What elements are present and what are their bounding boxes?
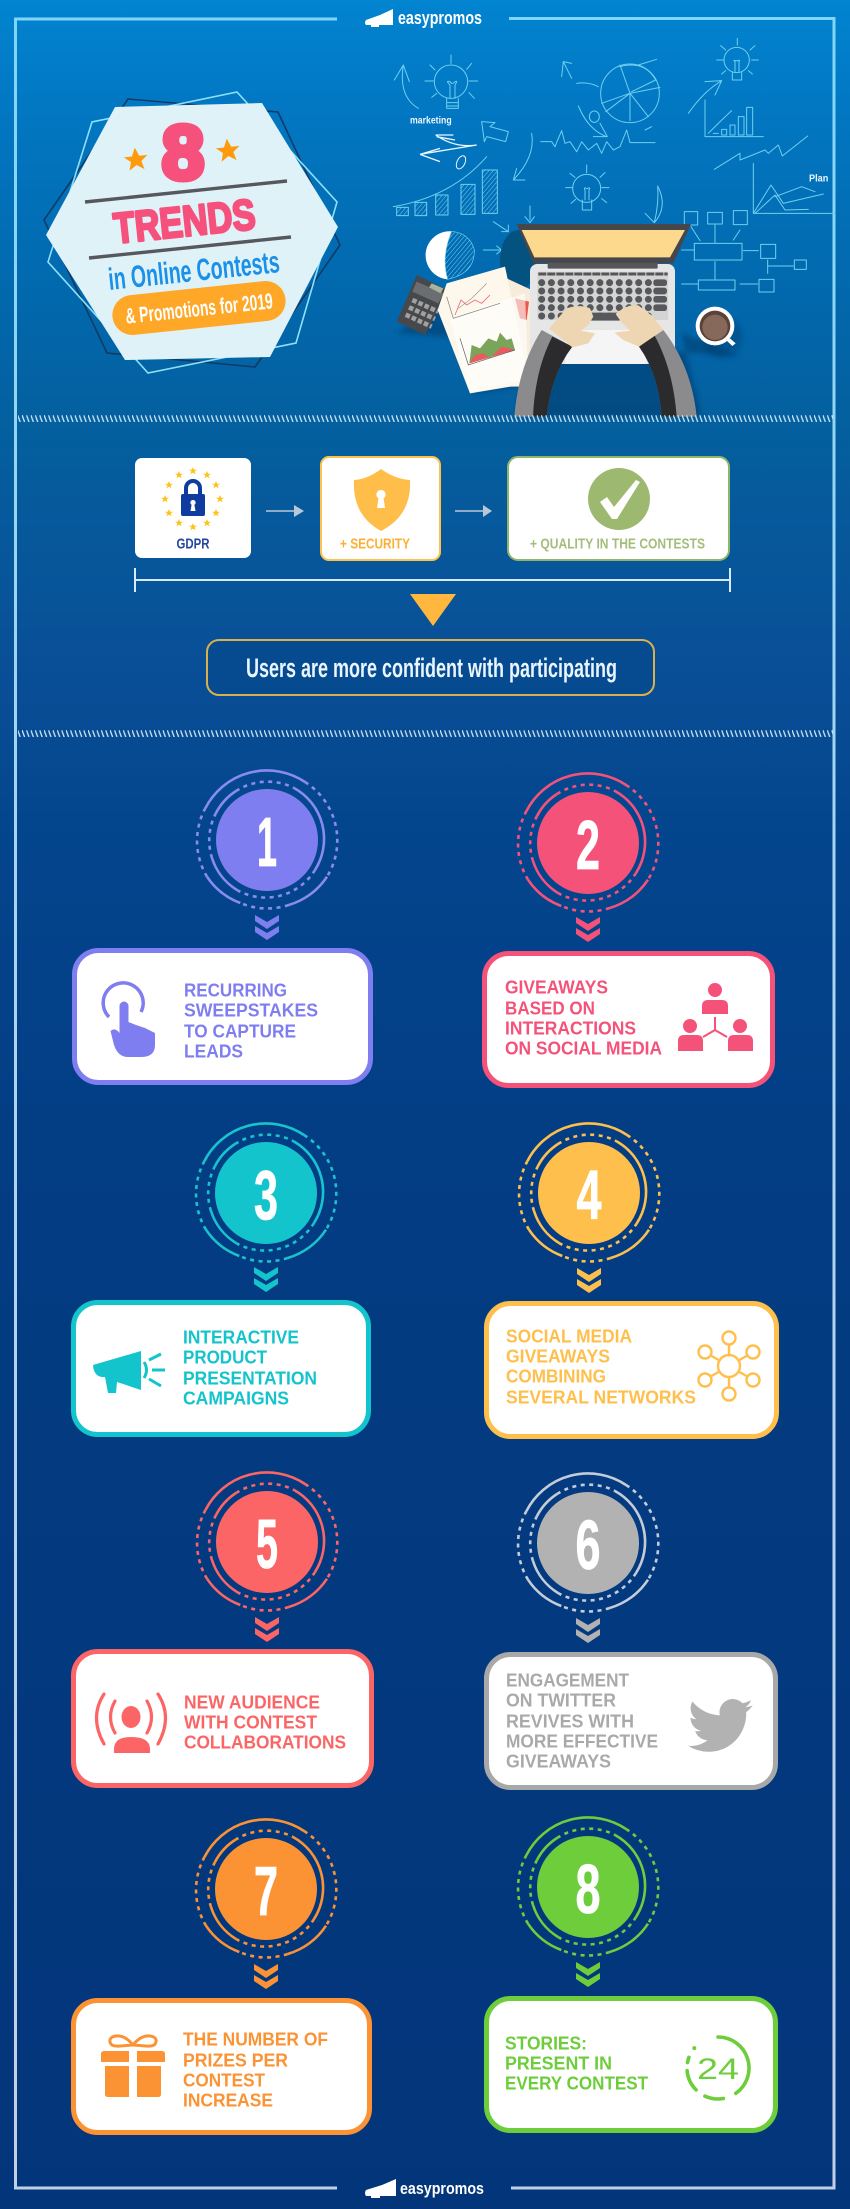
trend 8: EVERY CONTEST <box>505 2072 649 2094</box>
card: GDPR: GDPR <box>176 536 210 552</box>
sketch line art <box>393 38 835 292</box>
trend 3: PRESENTATION <box>183 1368 317 1388</box>
trend 3 <box>74 1123 368 1434</box>
arrow <box>266 505 304 517</box>
bracket <box>135 568 730 592</box>
card: security <box>321 457 440 560</box>
trend 7 <box>74 1819 370 2132</box>
logo: bottom easypromos: easypromos <box>400 2179 484 2198</box>
icon: 24 hours <box>687 2037 749 2099</box>
title word TRENDS: TRENDS <box>111 191 258 253</box>
trend 6: ENGAGEMENT <box>506 1670 630 1690</box>
orange pill <box>110 279 288 337</box>
trend 4: GIVEAWAYS <box>506 1346 610 1366</box>
trend 3: CAMPAIGNS <box>183 1388 289 1408</box>
sketch labels <box>410 115 828 185</box>
trend 3: INTERACTIVE <box>183 1326 299 1348</box>
trend 3: PRODUCT <box>183 1346 268 1368</box>
trend 6: REVIVES WITH <box>506 1710 634 1732</box>
trend 1: 1 <box>257 803 277 881</box>
laptop <box>517 224 691 364</box>
trend 5: NEW AUDIENCE <box>184 1692 320 1712</box>
sketch labels: marketing <box>410 115 452 126</box>
trend 8: PRESENT IN <box>505 2052 612 2074</box>
trend 8: STORIES: <box>505 2032 587 2054</box>
trend 1 <box>74 770 370 1082</box>
subtitle: in Online Contests <box>107 244 281 297</box>
trend 4 <box>486 1123 776 1436</box>
card: quality <box>508 457 729 560</box>
trend 4: 4 <box>576 1156 602 1234</box>
trend 6 <box>486 1473 776 1788</box>
card: quality: + QUALITY IN THE CONTESTS <box>530 536 705 552</box>
icon: people network <box>678 983 753 1051</box>
calculator <box>397 275 447 335</box>
trend 2: ON SOCIAL MEDIA <box>505 1038 662 1058</box>
icon: twitter bird <box>688 1699 753 1752</box>
trend 8: 8 <box>576 1850 600 1928</box>
trend 6: GIVEAWAYS <box>506 1750 611 1772</box>
trend 2 <box>484 773 772 1086</box>
trend 5 <box>74 1472 372 1786</box>
icon: 24 hours: 24 <box>697 2053 739 2086</box>
logo: top easypromos: easypromos <box>398 8 482 28</box>
trend 7: 7 <box>254 1852 278 1930</box>
logo: bottom easypromos <box>365 2179 484 2198</box>
title badge <box>44 92 340 373</box>
trend 2: GIVEAWAYS <box>505 976 608 998</box>
trend 2: 2 <box>576 806 600 884</box>
orange pill: & Promotions for 2019 <box>124 288 274 329</box>
soft shadows <box>397 297 742 417</box>
callout: Users are more confident with participating <box>246 653 617 683</box>
papers with charts <box>438 267 532 393</box>
trend 3: 3 <box>254 1156 278 1234</box>
trend 1: SWEEPSTAKES <box>184 1000 318 1020</box>
coffee cup <box>696 307 742 357</box>
trend 1: TO CAPTURE <box>184 1020 296 1042</box>
trend 6: 6 <box>576 1506 600 1584</box>
trend 4: COMBINING <box>506 1366 606 1386</box>
trend 2: BASED ON <box>505 998 595 1018</box>
panel: GDPR flow <box>135 457 730 695</box>
trend 5: COLLABORATIONS <box>184 1732 346 1752</box>
logo: top easypromos <box>365 8 482 28</box>
icon: broadcast person <box>96 1694 166 1753</box>
shadow and pie chart <box>500 230 537 290</box>
title number 8: 8 <box>162 111 204 196</box>
icon: gift <box>101 2036 165 2097</box>
icon: touch <box>103 983 155 1057</box>
callout <box>207 640 654 695</box>
trend 4: SEVERAL NETWORKS <box>506 1386 696 1408</box>
trend 5: 5 <box>256 1505 278 1583</box>
card: GDPR <box>135 458 251 558</box>
icon: megaphone <box>93 1351 165 1393</box>
divider hatch top <box>18 415 833 422</box>
trend 7: INCREASE <box>183 2090 273 2110</box>
card: security: + SECURITY <box>340 536 410 552</box>
trend 8 <box>486 1817 776 2130</box>
trend 7: THE NUMBER OF <box>183 2028 328 2050</box>
trend 1: LEADS <box>184 1040 243 1062</box>
trend 5: WITH CONTEST <box>184 1712 318 1732</box>
hands and arms <box>514 305 697 417</box>
illustration: hand-drawn marketing sketches and laptop <box>393 38 835 417</box>
trend 2: INTERACTIONS <box>505 1018 636 1038</box>
icon: network <box>698 1332 760 1400</box>
stars <box>123 137 241 171</box>
arrow <box>455 505 492 517</box>
trend 4: SOCIAL MEDIA <box>506 1326 632 1346</box>
trend 6: ON TWITTER <box>506 1690 616 1710</box>
divider hatch bottom <box>18 730 833 737</box>
down triangle <box>410 594 456 626</box>
trend 7: CONTEST <box>183 2070 266 2090</box>
sketch labels: Plan <box>809 174 828 185</box>
trend 1: RECURRING <box>184 980 287 1000</box>
trend 6: MORE EFFECTIVE <box>506 1730 658 1752</box>
trend 7: PRIZES PER <box>183 2050 288 2070</box>
